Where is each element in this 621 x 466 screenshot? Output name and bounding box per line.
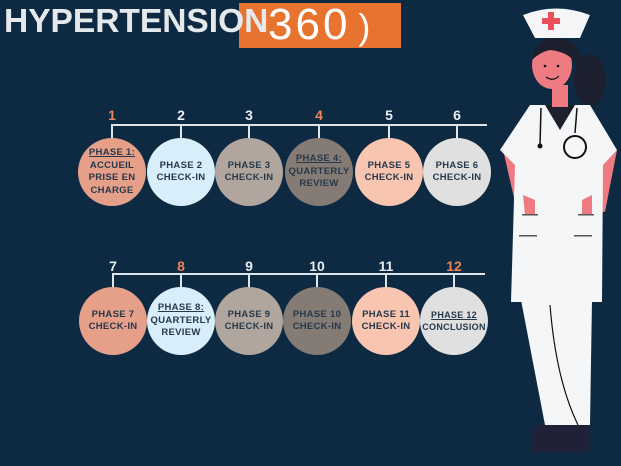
circle: phase 5 <box>355 138 423 206</box>
timeline row 1: 2 <box>177 107 185 123</box>
circle: phase 11: PHASE 11 <box>362 308 410 320</box>
face features <box>544 65 546 67</box>
circle: phase 5: PHASE 5 <box>368 160 410 170</box>
circle: phase 3: CHECK-IN <box>225 172 273 183</box>
timeline row 1: 3 <box>245 107 253 123</box>
circle: phase 2: PHASE 2 <box>160 160 202 170</box>
circle: phase 12: CONCLUSION <box>422 322 486 332</box>
arms <box>503 150 530 215</box>
circle: phase 5: CHECK-IN <box>365 172 413 183</box>
circle: phase 11 <box>352 287 420 355</box>
circle: phase 2 <box>147 138 215 206</box>
circle: phase 7: PHASE 7 <box>92 308 134 320</box>
circle: phase 1: PRISE EN <box>89 172 135 183</box>
illustration: nurse <box>500 8 617 452</box>
title: orange box <box>239 3 401 48</box>
circle: phase 9 <box>215 287 283 355</box>
circle: phase 12 <box>420 287 488 355</box>
timeline row 2: 9 <box>245 258 253 274</box>
circle: phase 11: CHECK-IN <box>362 321 410 332</box>
hat <box>523 8 590 38</box>
circle: phase 6: PHASE 6 <box>436 160 478 170</box>
numbers: 7 <box>109 258 117 274</box>
circle: phase 1: CHARGE <box>91 184 133 196</box>
hands <box>523 195 535 215</box>
circle: phase 9: PHASE 9 <box>228 308 270 320</box>
circle: phase 4: QUARTERLY <box>289 166 349 177</box>
title <box>4 0 401 49</box>
circle: phase 1 <box>78 138 146 206</box>
circle: phase 8: QUARTERLY <box>151 315 211 326</box>
circle: phase 2: CHECK-IN <box>157 172 205 183</box>
pockets <box>522 214 538 216</box>
face <box>532 41 572 89</box>
title text: HYPERTENSION <box>4 3 268 40</box>
circle: phase 4 <box>285 138 353 206</box>
circle: phase 1: ACCUEIL <box>90 160 134 170</box>
circle: phase 10: CHECK-IN <box>293 321 341 332</box>
stethoscope <box>540 108 541 145</box>
circle: phase 7 <box>79 287 147 355</box>
circle: phase 4: REVIEW <box>299 178 339 189</box>
hair top <box>532 38 581 70</box>
numbers: 1 <box>108 107 116 123</box>
timeline row 2: 8 <box>177 258 185 274</box>
timeline row 2 <box>79 258 488 355</box>
circle: phase 4: PHASE 4: <box>296 153 342 164</box>
timeline row 1: 4 <box>315 107 323 123</box>
circle: phase 8: REVIEW <box>161 327 201 338</box>
pants <box>521 300 592 425</box>
shoes <box>531 425 590 452</box>
circle: phase 3 <box>215 138 283 206</box>
circle: phase 10: PHASE 10 <box>293 308 341 320</box>
title number: 360) <box>268 0 373 49</box>
dress <box>500 105 617 302</box>
circle: phase 1: PHASE 1: <box>89 147 135 158</box>
hair back <box>574 54 606 106</box>
neck v <box>545 105 575 130</box>
circle: phase 9: CHECK-IN <box>225 321 273 332</box>
circle: phase 8: PHASE 8: <box>158 302 204 313</box>
circle: phase 6: CHECK-IN <box>433 172 481 183</box>
circle: phase 12: PHASE 12 <box>431 310 477 320</box>
circle: phase 8 <box>147 287 215 355</box>
circle: phase 6 <box>423 138 491 206</box>
timeline row 2: 10 <box>309 258 325 274</box>
timeline row 2: 12 <box>446 258 462 274</box>
circle: phase 10 <box>283 287 351 355</box>
timeline row 1: 5 <box>385 107 393 123</box>
timeline row 2: 11 <box>379 258 393 274</box>
neck <box>552 85 568 107</box>
timeline row 1 <box>78 107 491 206</box>
timeline row 1: 6 <box>453 107 461 123</box>
circle: phase 3: PHASE 3 <box>228 160 270 170</box>
circle: phase 7: CHECK-IN <box>89 321 137 332</box>
